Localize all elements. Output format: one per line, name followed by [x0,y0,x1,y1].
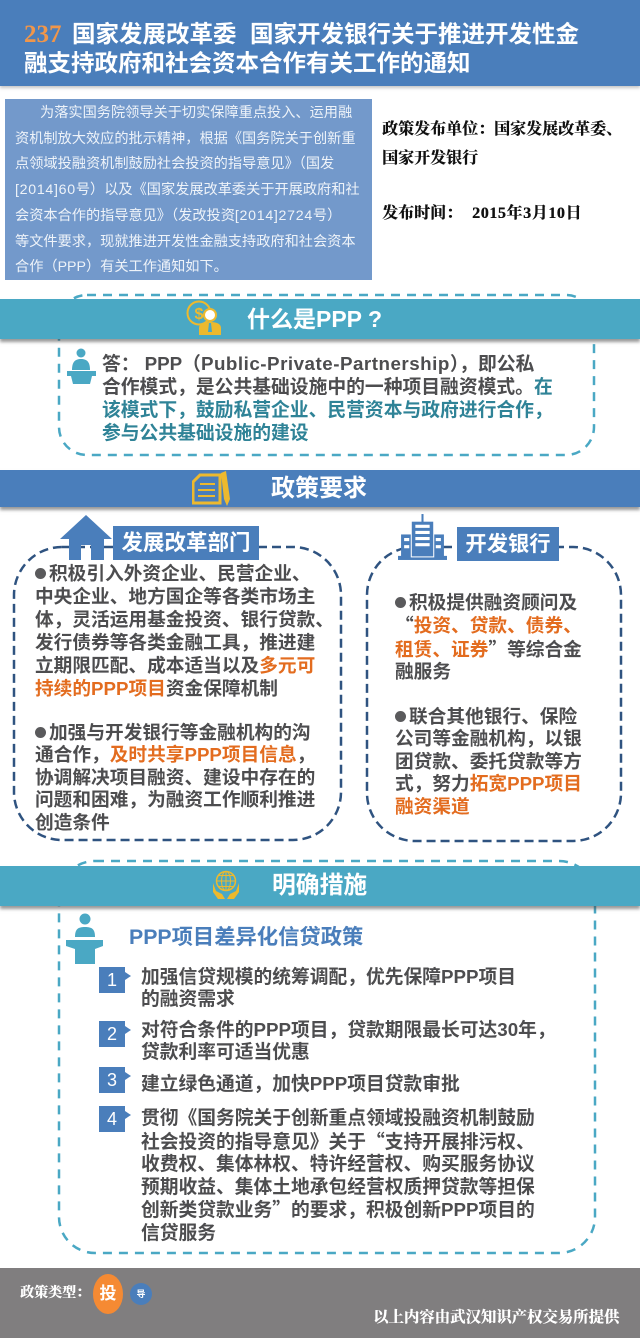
intro text panel: [2014]60号）以及《国家发展改革委关于开展政府和社 [15,182,360,198]
item 2 text [141,1019,556,1062]
badge 3 [99,1067,125,1093]
department text [35,562,334,833]
item 2 text: 贷款利率可适当优惠 [141,1041,310,1062]
badge 4: 4 [107,1109,117,1129]
title: 237 [24,21,62,48]
item 4 text: 收费权、集体林权、特许经营权、购买服务协议 [141,1153,535,1174]
panel: development and reform department: 通合作，及时共享PPP项目信息， [35,744,315,765]
title: 国家开发银行关于推进开发性金 [250,21,579,47]
item 2 text: 对符合条件的PPP项目，贷款期限最长可达30年， [141,1019,556,1040]
badge 3: 3 [107,1070,117,1090]
item 3 text: 建立绿色通道，加快PPP项目贷款审批 [141,1073,460,1094]
icon: globe in hands [213,870,239,899]
item 1 text: 加强信贷规模的统筹调配，优先保障PPP项目 [141,966,516,987]
subheading: differentiated credit policy: PPP项目差异化信贷政策 [129,925,363,949]
badge: guide: 导 [136,1289,146,1299]
department text: 立期限匹配、成本适当以及多元可 [35,654,315,676]
publisher info: 国家开发银行 [382,150,478,167]
department text: 积极引入外资企业、民营企业、 [49,562,311,584]
badge: invest [93,1274,123,1314]
title [24,21,579,76]
heading: what is PPP: 什么是PPP ? [247,306,382,332]
icon: money and person: $ [195,306,204,323]
heading: policy requirements: 政策要求 [271,475,367,502]
panel: what is PPP [0,294,640,456]
badge 1: 1 [107,970,117,990]
intro text panel: 点领域投融资机制鼓励社会投资的指导意见》（国发 [15,156,334,172]
publisher info: 政策发布单位：国家发展改革委、 [382,121,622,138]
badge 2 [99,1021,125,1047]
panel: development and reform department: 加强与开发银行等金融机构的沟 [49,722,311,742]
badge: guide [130,1283,152,1305]
publisher info: 2015年3月10日 [472,205,582,222]
item 4 text: 社会投资的指导意见》关于“支持开展排污权、 [141,1127,535,1154]
label: development and reform department [113,526,259,560]
header banner [0,0,640,86]
item 4 text: 信贷服务 [141,1222,216,1243]
section band: what is PPP [0,299,640,339]
intro text panel: 会资本合作的指导意见》（发改投资[2014]2724号） [15,208,341,224]
item 4 text [141,1107,535,1243]
panel: development bank: 公司等金融机构，以银 [395,728,582,749]
intro text panel: 合作（PPP）有关工作通知如下。 [15,259,228,275]
icon: money and person [186,300,221,335]
heading: clear measures: 明确措施 [272,872,367,899]
policy type label: 政策类型： [20,1286,90,1301]
panel: development bank: 团贷款、委托贷款等方 [395,751,582,772]
credit line: 以上内容由武汉知识产权交易所提供 [373,1309,619,1326]
icon: office building [398,514,447,560]
badge 2: 2 [107,1024,117,1044]
department text: 中央企业、地方国企等各类市场主 [35,586,315,606]
intro text panel [5,99,372,280]
bank text: 积极提供融资顾问及 [409,592,577,613]
badge 1 [99,967,125,993]
label: development bank: 开发银行 [465,532,551,556]
department text: 体，灵活运用基金投资、银行贷款、 [35,608,334,630]
panel: development bank: 融资渠道 [395,796,470,817]
label: development bank [457,527,559,561]
label: development and reform department: 发展改革部门 [121,531,250,555]
badge: invest: 投 [100,1284,116,1303]
publisher info [382,120,622,222]
panel: development bank: 式，努力拓宽PPP项目 [395,773,582,794]
item 1 text [141,966,516,1009]
bank text: “投资、贷款、债券、 [395,611,582,638]
panel: development and reform department: 创造条件 [35,812,110,833]
panel: development and reform department: 问题和困难，为融资工作顺利推进 [35,789,315,810]
section band: clear measures [0,866,640,906]
panel: development bank [366,514,622,842]
department text: 持续的PPP项目资金保障机制 [35,678,278,698]
answer text: 该模式下，鼓励私营企业、民营资本与政府进行合作， [102,398,553,420]
panel: development and reform department: 协调解决项目融资、建设中存在的 [35,767,315,788]
panel: development and reform department [12,515,342,842]
intro text panel: 为落实国务院领导关于切实保障重点投入、运用融 [40,105,352,121]
answer text [102,352,553,442]
publisher info: 发布时间： [382,205,462,222]
item 1 text: 的融资需求 [141,988,235,1009]
answer text: 合作模式，是公共基础设施中的一种项目融资模式。在 [102,376,553,396]
footer [0,1268,640,1338]
bank text: 融服务 [395,661,451,682]
item 4 text: 贯彻《国务院关于创新重点领域投融资机制鼓励 [141,1107,535,1128]
item 4 text: 创新类贷款业务”的要求，积极创新PPP项目的 [141,1195,535,1222]
icon: speaker podium [67,348,96,384]
icon: document and pen [192,471,230,506]
icon: podium speaker [66,914,103,964]
title: 国家发展改革委 [72,21,236,47]
title: 融支持政府和社会资本合作有关工作的通知 [24,50,470,76]
badge 4 [99,1106,125,1132]
bank text [395,592,582,817]
answer text: 答： PPP（Public-Private-Partnership），即公私 [102,352,534,374]
icon: house [60,515,112,560]
bank text: 租赁、证券”等综合金 [395,635,582,662]
intro text panel: 资机制放大效应的批示精神，根据《国务院关于创新重 [15,131,356,147]
section band: policy requirements [0,470,640,507]
panel: development bank: 联合其他银行、保险 [409,706,577,727]
panel: clear measures [0,860,640,1254]
item 4 text: 预期收益、集体土地承包经营权质押贷款等担保 [141,1176,535,1197]
answer text: 参与公共基础设施的建设 [102,422,309,442]
department text: 发行债券等各类金融工具，推进建 [35,632,315,652]
intro text panel: 等文件要求，现就推进开发性金融支持政府和社会资本 [15,234,356,250]
